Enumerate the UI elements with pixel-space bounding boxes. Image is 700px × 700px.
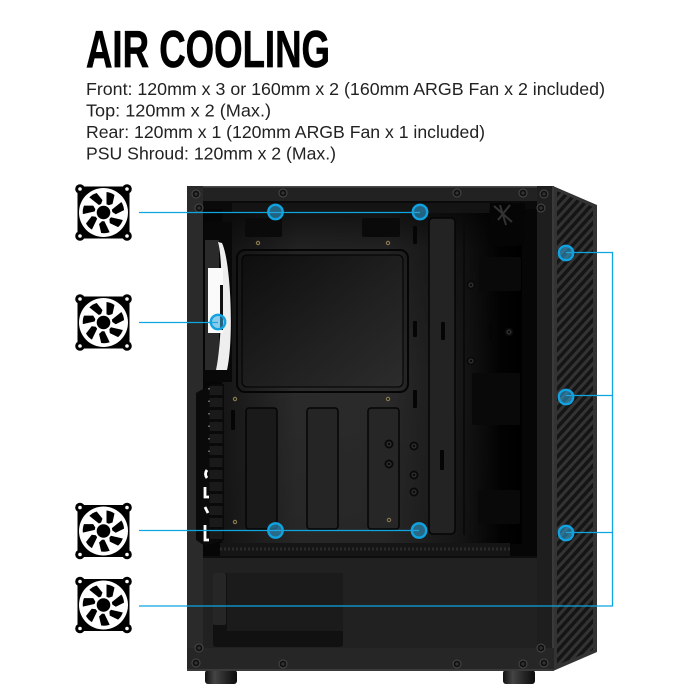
icon: fan front <box>75 503 132 559</box>
specification text block: Rear: 120mm x 1 (120mm ARGB Fan x 1 included) <box>86 122 485 142</box>
case frame <box>187 186 554 671</box>
specification text block: Front: 120mm x 3 or 160mm x 2 (160mm ARGB Fan x 2 included) <box>86 79 605 99</box>
PCI bracket with LED strip <box>196 384 224 546</box>
specification text block: PSU Shroud: 120mm x 2 (Max.) <box>86 144 336 164</box>
icon: fan shroud <box>75 577 132 633</box>
interior and motherboard tray <box>203 201 537 557</box>
case feet <box>205 670 535 684</box>
callout connector lines <box>139 212 612 606</box>
rear exhaust fan <box>204 222 232 382</box>
case screws <box>192 189 548 668</box>
title: AIR COOLING <box>86 21 330 79</box>
PC case <box>187 186 597 684</box>
CPU cable bundle <box>488 203 525 246</box>
specification text block <box>86 79 605 164</box>
PSU shroud <box>203 543 537 648</box>
case front side panel with carbon texture <box>553 186 597 671</box>
icon: fan top <box>75 184 132 241</box>
specification text block: Top: 120mm x 2 (Max.) <box>86 100 271 120</box>
callout markers <box>211 205 573 540</box>
icon: fan rear <box>75 294 132 351</box>
